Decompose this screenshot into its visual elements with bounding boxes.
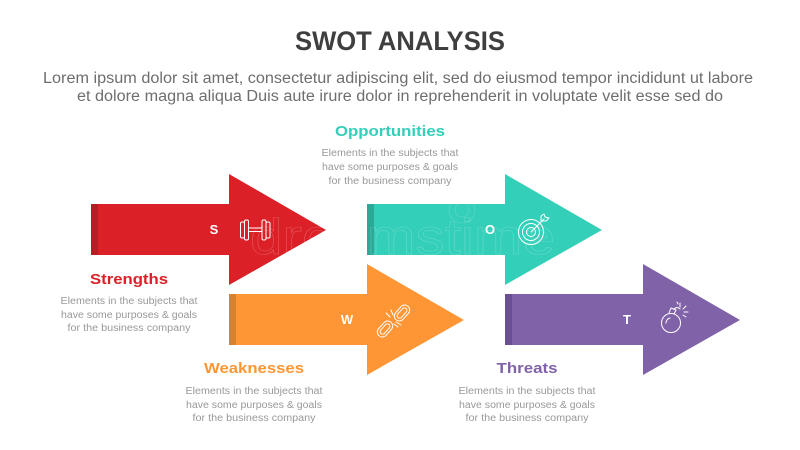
- label: weaknesses: have some purposes & goals: [186, 400, 322, 411]
- label: threats: Elements in the subjects that: [458, 386, 596, 397]
- icon: bomb: [662, 302, 688, 332]
- label: weaknesses: [186, 360, 323, 424]
- label: weaknesses: Elements in the subjects that: [186, 386, 323, 397]
- label: strengths: Elements in the subjects that: [60, 296, 198, 307]
- label: opportunities: Opportunities: [335, 123, 445, 140]
- label: strengths: [60, 271, 198, 334]
- arrow: threats: [505, 264, 740, 375]
- label: opportunities: for the business company: [328, 176, 452, 187]
- arrow: threats: T: [623, 312, 631, 327]
- watermark: dreamstime: [250, 209, 555, 265]
- label: threats: [458, 360, 596, 424]
- label: threats: for the business company: [466, 413, 588, 424]
- icon: dumbbell: [240, 220, 270, 240]
- label: threats: have some purposes & goals: [459, 400, 595, 411]
- subtitle text: et dolore magna aliqua Duis aute irure dolor in reprehenderit in voluptate velit esse sed do: [77, 88, 723, 105]
- arrow: weaknesses: [229, 264, 464, 375]
- label: threats: Threats: [496, 360, 558, 377]
- label: strengths: for the business company: [68, 323, 190, 334]
- label: weaknesses: Weaknesses: [204, 360, 304, 377]
- arrow: opportunities: [367, 174, 602, 285]
- subtitle text: Lorem ipsum dolor sit amet, consectetur adipiscing elit, sed do eiusmod tempor incididunt ut labore: [43, 70, 753, 87]
- label: weaknesses: for the business company: [192, 413, 316, 424]
- label: strengths: Strengths: [90, 271, 168, 288]
- label: opportunities: Elements in the subjects that: [322, 148, 459, 159]
- label: opportunities: [322, 123, 459, 187]
- label: strengths: have some purposes & goals: [61, 310, 197, 321]
- arrow: strengths: S: [210, 222, 219, 237]
- label: opportunities: have some purposes & goals: [322, 162, 458, 173]
- arrow: weaknesses: W: [341, 312, 354, 327]
- icon: target: [518, 214, 549, 244]
- arrow: opportunities: O: [485, 222, 495, 237]
- subtitle text: [43, 70, 753, 105]
- icon: broken chain: [375, 303, 412, 339]
- arrow: strengths: [91, 174, 326, 285]
- title: SWOT ANALYSIS: [295, 26, 505, 56]
